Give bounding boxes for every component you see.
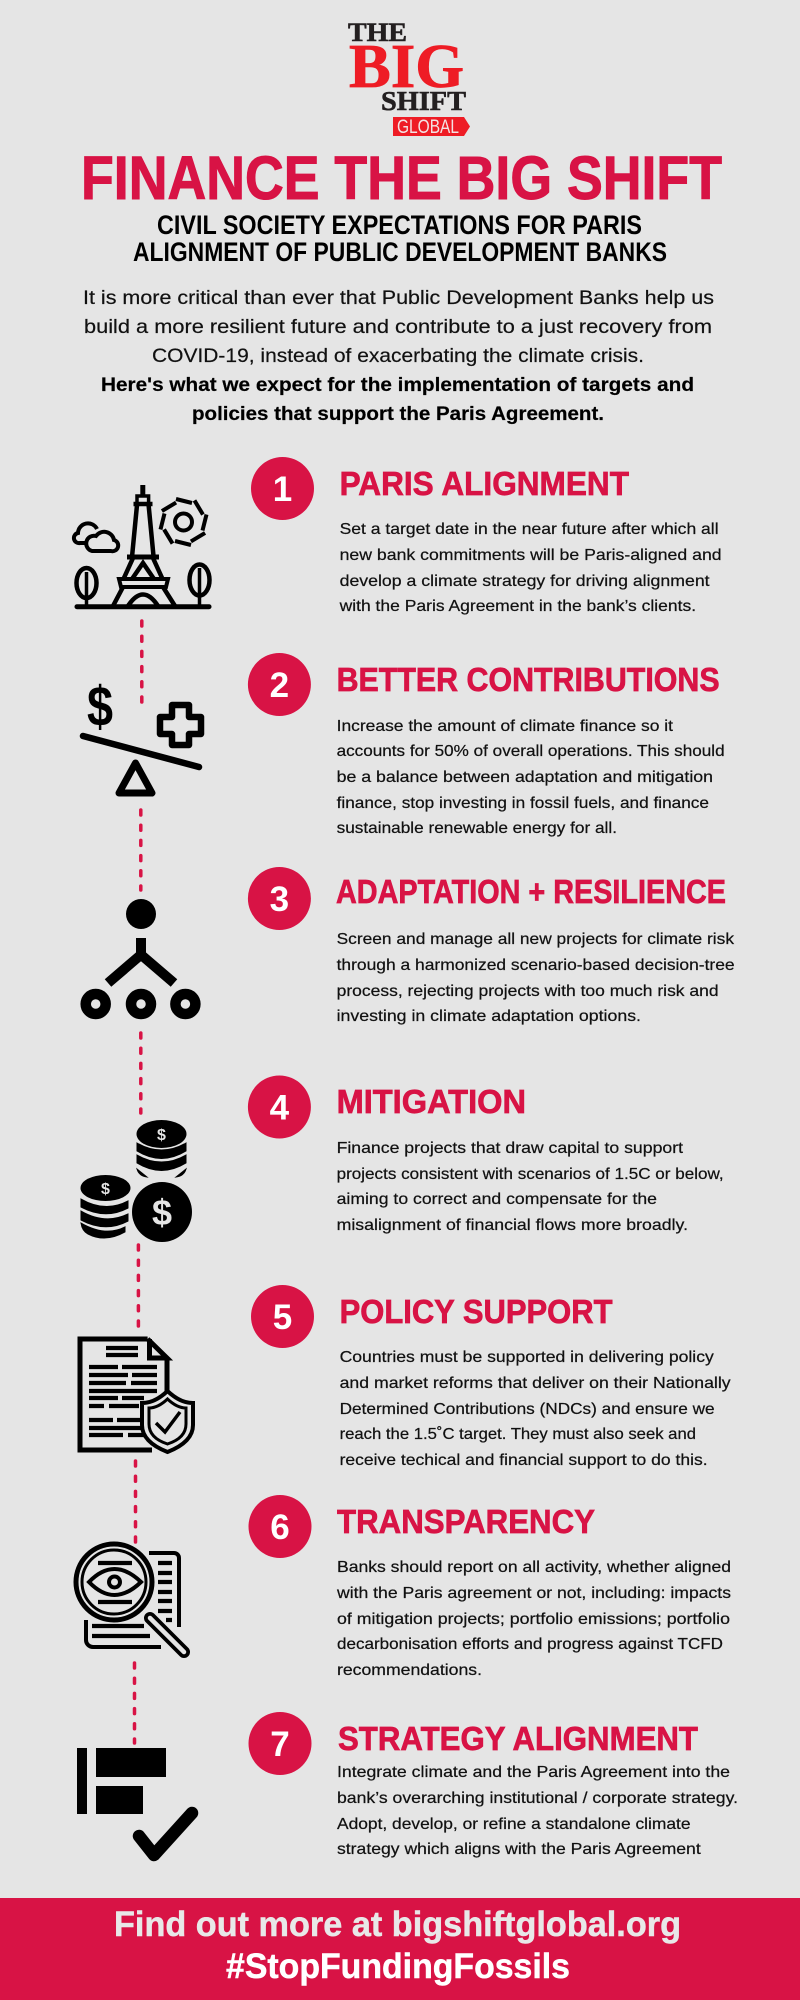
body text: Banks should report on all activity, whether aligned	[337, 1559, 731, 1576]
intro text: policies that support the Paris Agreement.	[192, 403, 604, 425]
body text: Finance projects that draw capital to support	[337, 1140, 684, 1157]
number badge 1	[251, 457, 314, 520]
icon: Eiffel tower with cloud, sun and trees	[74, 485, 210, 607]
connector 2	[139, 810, 143, 890]
heading: POLICY SUPPORT	[340, 1293, 612, 1330]
number badge 7: 7	[270, 1725, 290, 1764]
body text: finance, stop investing in fossil fuels, and finance	[337, 795, 709, 812]
connector 6	[133, 1663, 136, 1743]
body text	[337, 1140, 724, 1234]
body text: Set a target date in the near future after which all	[340, 521, 719, 538]
icon: stacks of coins	[80, 1120, 192, 1242]
number badge 5: 5	[273, 1298, 292, 1337]
body text	[339, 521, 722, 615]
icon: balance scale with dollar and plus	[83, 675, 201, 793]
body text: with the Paris agreement or not, including: impacts	[336, 1585, 731, 1602]
heading: BETTER CONTRIBUTIONS	[337, 661, 720, 698]
body text: Countries must be supported in delivering policy	[340, 1349, 714, 1366]
connector 1	[140, 621, 144, 702]
body text: Adopt, develop, or refine a standalone climate	[337, 1816, 691, 1833]
number badge 2: 2	[270, 666, 289, 705]
body text: and market reforms that deliver on their Nationally	[340, 1375, 731, 1392]
logo: The Big Shift Global: BIG	[349, 33, 464, 101]
body text: receive techical and financial support to do this.	[340, 1452, 708, 1469]
footer banner	[0, 1898, 800, 2000]
body text	[337, 1764, 738, 1858]
number badge 5	[251, 1285, 314, 1348]
section 2: Better Contributions	[248, 653, 725, 837]
connector 3	[139, 1033, 143, 1113]
intro text: Here's what we expect for the implementation of targets and	[101, 374, 694, 396]
section 1: Paris Alignment	[251, 457, 722, 615]
number badge 1: 1	[273, 470, 292, 509]
body text: be a balance between adaptation and mitigation	[337, 769, 713, 786]
number badge 4	[248, 1076, 311, 1138]
number badge 6: 6	[270, 1508, 290, 1547]
number badge 6	[248, 1495, 312, 1558]
section 3: Adaptation + Resilience	[248, 867, 735, 1025]
body text	[340, 1349, 731, 1469]
body text: misalignment of financial flows more broadly.	[337, 1217, 688, 1234]
icon: stacks of coins: $	[152, 1192, 172, 1233]
intro text	[83, 287, 714, 425]
connector 5	[134, 1461, 137, 1542]
body text: process, rejecting projects with too much risk and	[337, 983, 719, 1000]
number badge 4: 4	[270, 1088, 290, 1128]
number badge 2	[248, 653, 311, 716]
footer hashtag: #StopFundingFossils	[226, 1947, 570, 1986]
body text	[336, 1559, 731, 1679]
number badge 3	[248, 867, 311, 930]
section 4: Mitigation	[248, 1076, 724, 1234]
body text: investing in climate adaptation options.	[337, 1008, 641, 1025]
body text: recommendations.	[337, 1662, 482, 1679]
icon: magnifying glass over document	[76, 1544, 184, 1652]
number badge 7	[248, 1712, 312, 1775]
body text: of mitigation projects; portfolio emissions; portfolio	[337, 1611, 730, 1628]
body text: sustainable renewable energy for all.	[337, 820, 617, 837]
body text: through a harmonized scenario-based decision-tree	[337, 957, 735, 974]
logo: The Big Shift Global: SHIFT	[381, 86, 466, 116]
number badge 3: 3	[270, 880, 289, 919]
body text: reach the 1.5˚C target. They must also seek and	[340, 1426, 696, 1443]
logo: The Big Shift Global	[348, 18, 470, 138]
body text	[337, 718, 725, 837]
body text: decarbonisation efforts and progress against TCFD	[337, 1636, 723, 1653]
icon: document with shield	[80, 1339, 193, 1452]
body text: Integrate climate and the Paris Agreement into the	[337, 1764, 730, 1781]
subtitle: CIVIL SOCIETY EXPECTATIONS FOR PARIS	[157, 210, 642, 240]
body text: projects consistent with scenarios of 1.5C or below,	[337, 1166, 724, 1183]
connector 4	[137, 1245, 140, 1327]
heading: ADAPTATION + RESILIENCE	[336, 873, 726, 910]
body text: Increase the amount of climate finance so it	[337, 718, 674, 735]
section 5: Policy Support	[251, 1285, 731, 1469]
body text: new bank commitments will be Paris-aligned and	[340, 547, 722, 564]
subtitle	[133, 210, 667, 267]
body text: develop a climate strategy for driving alignment	[340, 573, 710, 590]
body text: aiming to correct and compensate for the	[337, 1191, 657, 1208]
body text: strategy which aligns with the Paris Agreement	[337, 1841, 701, 1858]
section 6: Transparency	[248, 1495, 731, 1679]
icon: decision tree	[86, 899, 195, 1014]
logo: The Big Shift Global: THE	[348, 18, 407, 47]
body text: bank’s overarching institutional / corporate strategy.	[337, 1790, 738, 1807]
footer link text: Find out more at bigshiftglobal.org	[114, 1905, 681, 1944]
subtitle: ALIGNMENT OF PUBLIC DEVELOPMENT BANKS	[133, 237, 667, 267]
body text: with the Paris Agreement in the bank’s clients.	[339, 598, 696, 615]
body text	[337, 931, 735, 1025]
title: FINANCE THE BIG SHIFT	[81, 144, 722, 212]
icon: stacks of coins: $	[157, 1127, 166, 1144]
body text: Determined Contributions (NDCs) and ensure we	[340, 1401, 715, 1418]
intro text: build a more resilient future and contribute to a just recovery from	[84, 316, 712, 338]
heading: TRANSPARENCY	[337, 1503, 595, 1540]
intro text: It is more critical than ever that Public Development Banks help us	[83, 287, 714, 309]
intro text: COVID-19, instead of exacerbating the climate crisis.	[152, 345, 644, 367]
section 7: Strategy Alignment	[248, 1712, 738, 1858]
heading: PARIS ALIGNMENT	[340, 465, 629, 502]
body text: Screen and manage all new projects for climate risk	[337, 931, 735, 948]
heading: STRATEGY ALIGNMENT	[338, 1720, 698, 1757]
logo: The Big Shift Global: GLOBAL	[397, 117, 459, 138]
heading: MITIGATION	[337, 1083, 526, 1120]
icon: stacks of coins: $	[101, 1181, 110, 1198]
icon: balance scale with dollar and plus: $	[87, 675, 113, 739]
icon: strategy bars with check mark	[77, 1748, 192, 1855]
body text: accounts for 50% of overall operations. This should	[337, 743, 725, 760]
